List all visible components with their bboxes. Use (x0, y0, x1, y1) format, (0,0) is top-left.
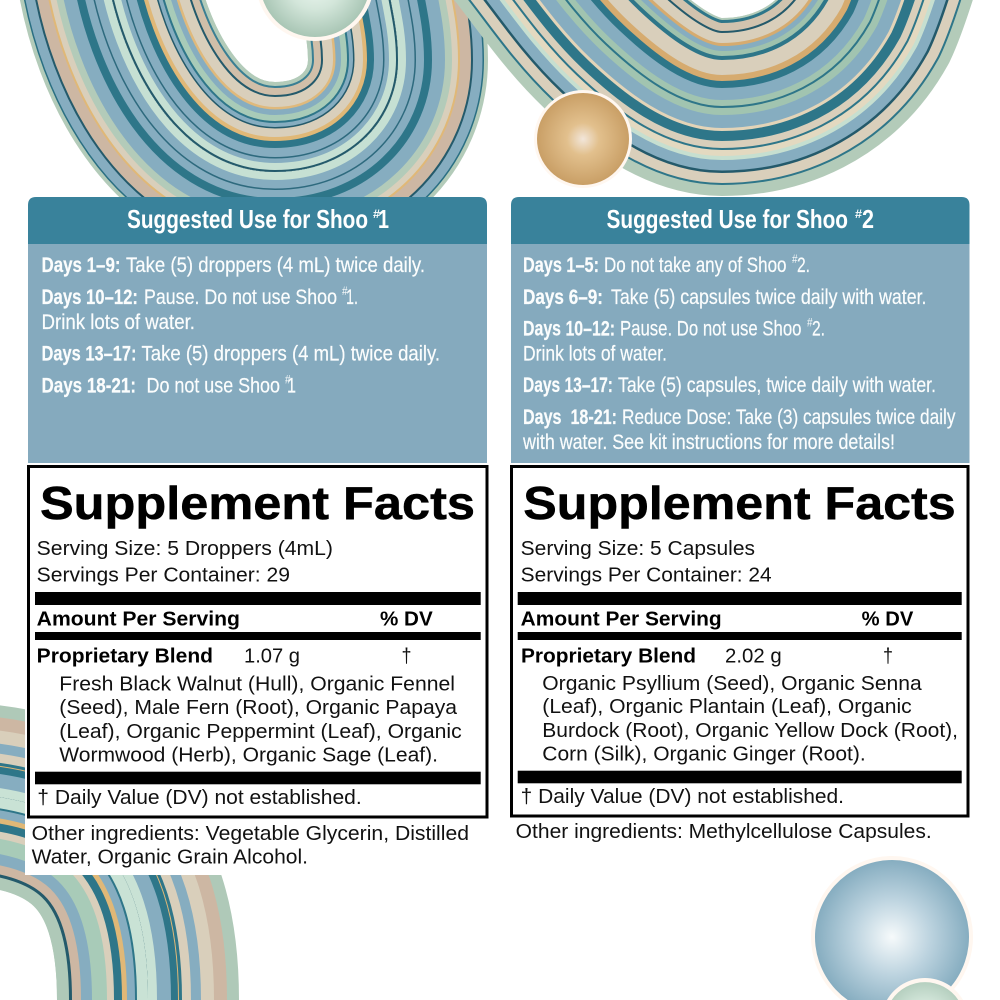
serving info: Serving Size: 5 Capsules (521, 537, 755, 560)
panel: supplement facts Shoo #2 (512, 466, 968, 816)
instructions: days 13-17: Days 13–17: (523, 374, 613, 397)
ingredient list: Wormwood (Herb), Organic Sage (Leaf). (59, 744, 438, 766)
heading: Suggested Use for Shoo (127, 204, 368, 234)
ingredient list: Organic Psyllium (Seed), Organic Senna (542, 672, 922, 695)
serving info: Serving Size: 5 Droppers (4mL) (37, 537, 333, 560)
proprietary blend row (37, 644, 411, 668)
other ingredients: Shoo #2: Other ingredients: Methylcellulose Capsules. (516, 820, 932, 843)
instructions: days 6-9 (523, 286, 926, 309)
sphere: gold (534, 90, 632, 188)
instructions: days 10-12: Days 10–12: (42, 286, 138, 309)
instructions: days 18-21: 1 (287, 374, 296, 398)
other ingredients: Shoo #1: Other ingredients: Vegetable Glycerin, Distilled (32, 822, 469, 845)
instructions: days 10-12: 1. (346, 286, 358, 309)
instructions: days 13-17: Take (5) capsules, twice daily with water. (618, 374, 936, 397)
panel header bar (511, 197, 970, 244)
sphere: blue (811, 856, 973, 1000)
instructions: days 13-17 (523, 374, 936, 397)
label title: Supplement Facts (523, 477, 956, 529)
proprietary blend row: † (883, 644, 893, 668)
thick rule (518, 771, 962, 783)
instructions: days 13-17 (42, 342, 440, 366)
medium rule (35, 632, 481, 640)
instructions: days 1-5: Days 1–5: (523, 254, 599, 277)
thick rule (35, 592, 481, 605)
instructions: days 18-21: with water. See kit instructions for more details! (522, 431, 895, 454)
instructions: days 10-12: Drink lots of water. (523, 342, 667, 366)
striped ribbon: bottom left curve (0, 793, 148, 1000)
instructions: days 13-17: Days 13–17: (42, 342, 136, 366)
footnote: † Daily Value (DV) not established. (37, 786, 362, 809)
instructions: days 13-17: Take (5) droppers (4 mL) twice daily. (142, 342, 440, 366)
instructions: days 1-5: Do not take any of Shoo (604, 254, 786, 277)
proprietary blend row (521, 644, 893, 668)
ingredient list: Fresh Black Walnut (Hull), Organic Fennel (59, 672, 455, 696)
panel: supplement facts Shoo #1 (28, 466, 487, 817)
proprietary blend row: 2.02 g (725, 644, 782, 668)
instructions: days 10-12: Pause. Do not use Shoo (144, 286, 337, 309)
instructions: days 1-9: Take (5) droppers (4 mL) twice daily. (126, 254, 425, 277)
label title: Supplement Facts (40, 477, 475, 529)
column headers (521, 608, 914, 630)
instructions: days 18-21 (42, 372, 296, 398)
other ingredients: Shoo #1: Water, Organic Grain Alcohol. (32, 846, 308, 868)
instructions: days 18-21: Do not use Shoo (146, 374, 280, 398)
instructions: days 1-5: # (792, 252, 798, 266)
ingredient list: (Seed), Male Fern (Root), Organic Papaya (59, 696, 458, 719)
proprietary blend row: 1.07 g (244, 644, 300, 668)
instructions: days 18-21: Days 18-21: (523, 406, 617, 429)
serving info (521, 537, 772, 586)
ingredient list: (Leaf), Organic Plantain (Leaf), Organic (542, 695, 912, 718)
label frame (512, 466, 968, 816)
column headers: % DV (380, 608, 433, 630)
label frame (28, 466, 487, 817)
heading: Suggested Use for Shoo (606, 204, 848, 234)
white backing behind left facts panel (25, 463, 490, 875)
panel: suggested use for Shoo #2 (511, 197, 970, 463)
striped ribbon: top left curve (106, 0, 398, 172)
instructions: days 10-12 (523, 316, 825, 366)
panel body (28, 240, 487, 463)
heading: # (373, 207, 380, 221)
instructions: days 18-21: Days 18-21: (42, 374, 136, 398)
panel body (511, 240, 970, 463)
ingredient list (59, 672, 462, 766)
serving info: Servings Per Container: 29 (37, 564, 290, 586)
instructions: days 18-21: # (285, 372, 291, 386)
column headers: % DV (862, 608, 914, 630)
instructions: days 1-9: Days 1–9: (42, 254, 120, 277)
instructions: days 10-12: Drink lots of water. (42, 311, 195, 334)
instructions: days 1-5: 2. (797, 254, 810, 277)
medium rule (518, 632, 962, 640)
thick rule (518, 592, 962, 605)
panel header bar (28, 197, 487, 244)
instructions: days 10-12: 2. (812, 318, 825, 340)
panel: suggested use for Shoo #1 (28, 197, 487, 463)
proprietary blend row: † (402, 644, 412, 668)
instructions: days 10-12 (42, 284, 358, 334)
ingredient list: Burdock (Root), Organic Yellow Dock (Root), (542, 719, 958, 742)
sphere: green top (256, 0, 374, 41)
heading: 1 (378, 204, 389, 234)
ingredient list (542, 672, 958, 766)
thick rule (35, 772, 481, 784)
instructions: days 10-12: # (342, 284, 348, 298)
heading: 2 (862, 204, 874, 234)
column headers: Amount Per Serving (521, 608, 722, 630)
sphere: green bottom (887, 978, 963, 1000)
instructions: days 18-21 (522, 406, 956, 454)
ingredient list: Corn (Silk), Organic Ginger (Root). (542, 742, 866, 766)
footnote: † Daily Value (DV) not established. (521, 785, 844, 808)
serving info (37, 537, 333, 586)
instructions: days 6-9: Days 6–9: (523, 286, 603, 309)
instructions: days 6-9: Take (5) capsules twice daily with water. (611, 286, 926, 309)
proprietary blend row: Proprietary Blend (521, 646, 696, 668)
other ingredients: Shoo #1 (32, 822, 469, 868)
ingredient list: (Leaf), Organic Peppermint (Leaf), Organic (59, 720, 462, 743)
serving info: Servings Per Container: 24 (521, 564, 772, 586)
instructions: days 10-12: Days 10–12: (523, 318, 615, 340)
instructions: days 10-12: Pause. Do not use Shoo (620, 318, 802, 340)
instructions: days 1-5 (523, 252, 810, 277)
heading: # (855, 207, 862, 221)
column headers: Amount Per Serving (37, 608, 240, 630)
striped ribbon: top right curve (520, 0, 889, 107)
column headers (37, 608, 433, 630)
proprietary blend row: Proprietary Blend (37, 646, 213, 668)
instructions: days 10-12: # (807, 316, 813, 330)
